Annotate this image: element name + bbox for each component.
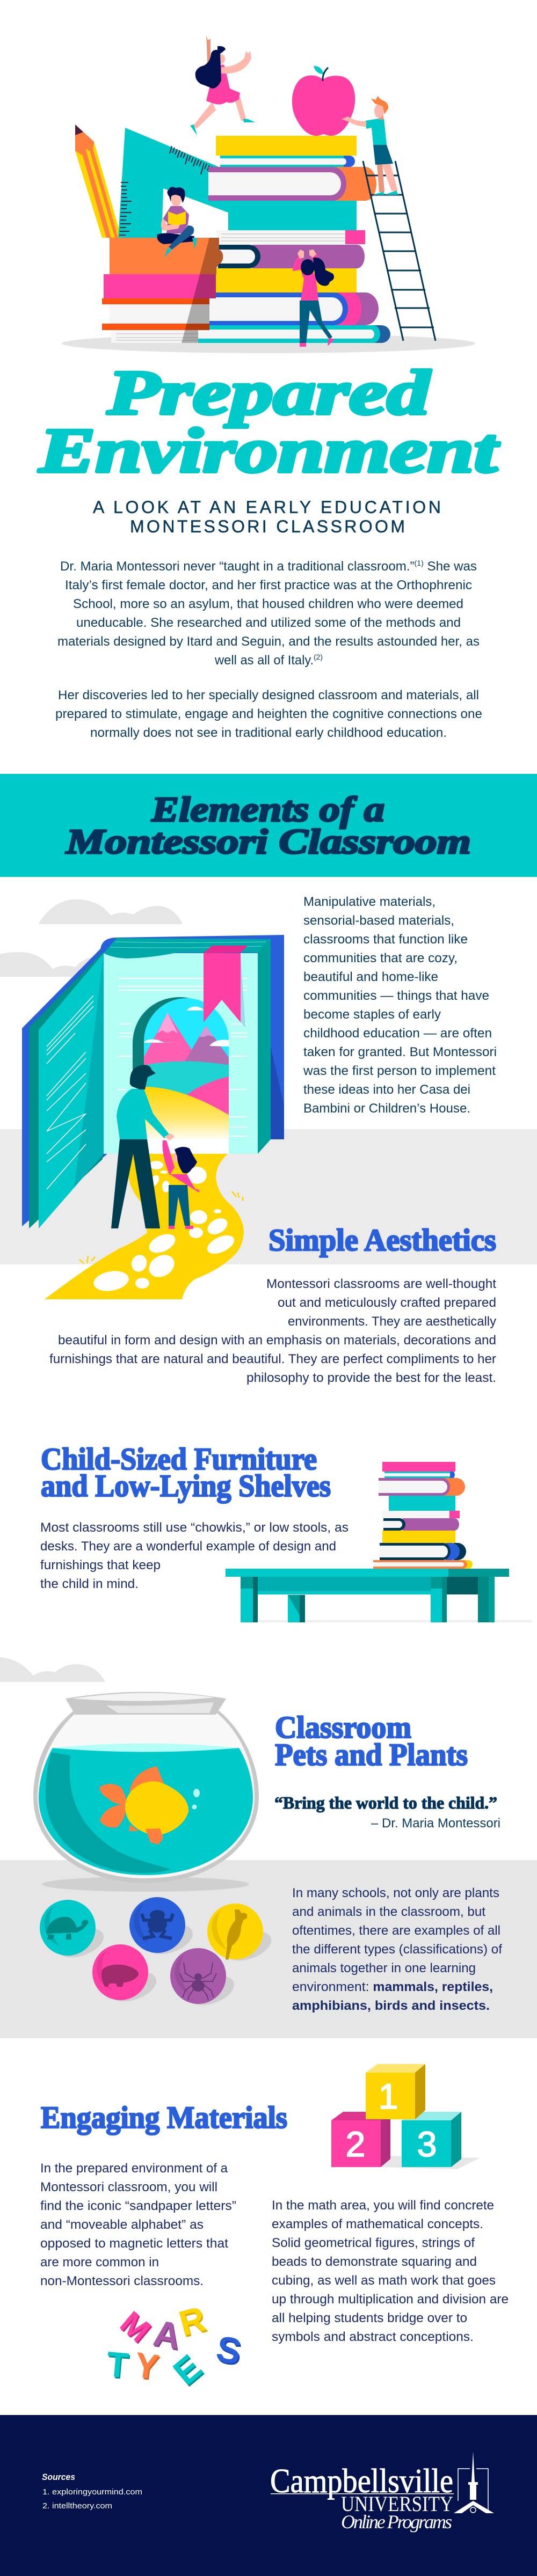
- block 1: 1: [379, 2076, 398, 2116]
- sources: 1. exploringyourmind.com: [42, 2487, 142, 2497]
- doorway scene: [144, 998, 229, 1154]
- book stack: [373, 1462, 473, 1569]
- illustration: alphabet letters: Y: [133, 2346, 162, 2389]
- title: [39, 357, 499, 486]
- intro text: (2): [314, 653, 323, 661]
- floor line: [258, 1620, 532, 1622]
- illustration: alphabet letters: [105, 2299, 245, 2394]
- text: pets and plants: the different types (classifications) of: [292, 1942, 502, 1957]
- text: intro to classroom elements: Bambini or Children’s House.: [303, 1101, 470, 1116]
- illustration: alphabet letters: R: [175, 2299, 210, 2344]
- girl holding hand: [163, 1140, 200, 1229]
- text: math area: In the math area, you will find concrete: [272, 2198, 494, 2213]
- water: [39, 1748, 253, 1875]
- text: math area: up through multiplication and division are: [272, 2292, 509, 2307]
- book stack right: [198, 136, 390, 343]
- text: pets and plants: amphibians, birds and insects.: [292, 1999, 490, 2013]
- illustration: alphabet letters: Y: [132, 2345, 161, 2387]
- text: furniture: desks. They are a wonderful example of design and: [40, 1539, 336, 1554]
- man: [111, 1065, 175, 1228]
- text: intro to classroom elements: [303, 895, 497, 1116]
- icons: animal circles: [40, 1897, 275, 2011]
- sparks: [79, 1191, 243, 1263]
- illustration: open book with path: [22, 935, 284, 1299]
- child: girl jumping: [190, 35, 255, 135]
- glass bowl: [33, 1711, 259, 1883]
- quote: [274, 1793, 500, 1831]
- text: intro to classroom elements: childhood education — are often: [303, 1026, 492, 1041]
- block 3: 3: [417, 2124, 437, 2164]
- left page: [39, 953, 104, 1228]
- text: furniture: Most classrooms still use “chowkis,” or low stools, as: [40, 1520, 349, 1535]
- illustration: alphabet letters: E: [167, 2348, 211, 2394]
- yellow path: [45, 1154, 244, 1299]
- intro text: materials designed by Itard and Seguin, and the results astounded her, as: [57, 634, 480, 649]
- text: engaging materials: [40, 2161, 236, 2288]
- text: furniture: [40, 1520, 349, 1591]
- child: girl reaching up: [293, 250, 335, 347]
- text: simple aesthetics: Montessori classrooms are well-thought: [266, 1277, 496, 1291]
- heading: child-sized furniture: and Low-Lying Shelves: [41, 1468, 331, 1503]
- text: pets and plants: animals together in one learning: [292, 1961, 476, 1975]
- text: engaging materials: opposed to magnetic letters that: [40, 2236, 228, 2251]
- intro text: She was: [424, 559, 477, 574]
- text: intro to classroom elements: classrooms that function like: [303, 932, 468, 947]
- text: simple aesthetics: out and meticulously crafted prepared: [278, 1296, 496, 1310]
- hero illustration: books, pencil and children: [62, 35, 475, 353]
- illustration: alphabet letters: A: [150, 2312, 184, 2357]
- intro text: School, more so an asylum, that housed children who were deemed: [73, 597, 463, 611]
- text: engaging materials: and “moveable alphabet” as: [40, 2218, 204, 2232]
- intro text: normally does not see in traditional early childhood education.: [90, 726, 447, 740]
- logo: Campbellsville University: UNIVERSITY: [341, 2492, 453, 2516]
- text: pets and plants: oftentimes, there are examples of all: [292, 1923, 500, 1938]
- block 2: 2: [346, 2124, 365, 2164]
- text: engaging materials: non-Montessori classrooms.: [40, 2274, 204, 2288]
- text: math area: examples of mathematical concepts.: [272, 2217, 483, 2231]
- text: math area: symbols and abstract conceptions.: [272, 2330, 474, 2344]
- illustration: alphabet letters: M: [113, 2304, 157, 2349]
- illustration: fish bowl: [33, 1692, 259, 1892]
- text: intro to classroom elements: these ideas into her Casa dei: [303, 1082, 470, 1097]
- illustration: alphabet letters: T: [106, 2345, 131, 2387]
- set square: [118, 128, 357, 239]
- title: Prepared: [107, 357, 431, 428]
- text: engaging materials: Montessori classroom, you will: [40, 2180, 217, 2194]
- footer: [0, 2415, 537, 2576]
- text: simple aesthetics: philosophy to provide the best for the least.: [246, 1371, 496, 1385]
- cloud: [0, 1657, 105, 1682]
- text: simple aesthetics: furnishings that are natural and beautiful. They are perfect compliments to her: [49, 1352, 496, 1366]
- block 1: [366, 2064, 425, 2119]
- text: intro to classroom elements: beautiful and home-like: [303, 970, 438, 984]
- text: intro to classroom elements: was the first person to implement: [303, 1064, 496, 1078]
- illustration: alphabet letters: T: [105, 2344, 130, 2385]
- book stack left: [102, 238, 223, 343]
- child: reading on the book: [157, 187, 197, 258]
- intro text: Italy’s first female doctor, and her first practice was at the Orthophrenic: [65, 578, 472, 592]
- icon: parrot: [207, 1904, 275, 1966]
- text: intro to classroom elements: become staples of early: [303, 1007, 441, 1022]
- heading: classroom pets and plants: [275, 1710, 468, 1772]
- text: intro to classroom elements: communities that are cozy,: [303, 951, 458, 965]
- bowl shadow: [42, 1877, 249, 1892]
- text: simple aesthetics: [49, 1277, 496, 1385]
- subtitle: [93, 497, 441, 536]
- text: furniture: the child in mind.: [40, 1577, 139, 1591]
- text: pets and plants: In many schools, not only are plants: [292, 1886, 499, 1900]
- text: pets and plants: environment: mammals, reptiles,: [292, 1980, 493, 1994]
- right page: [104, 953, 258, 1154]
- heading: child-sized furniture: Child-Sized Furniture: [41, 1441, 317, 1476]
- text: math area: cubing, as well as math work that goes: [272, 2273, 496, 2288]
- text: intro to classroom elements: Manipulative materials,: [303, 895, 436, 909]
- sources: [42, 2472, 142, 2511]
- ruler ticks: [119, 146, 217, 235]
- illustration: number blocks: [331, 2064, 480, 2169]
- heading: classroom pets and plants: Classroom: [275, 1710, 411, 1745]
- text: simple aesthetics: environments. They are aesthetically: [288, 1314, 496, 1329]
- background band: pets and plants: [0, 1860, 537, 2038]
- fish: [99, 1766, 200, 1845]
- illustration: alphabet letters: R: [176, 2300, 211, 2345]
- text: intro to classroom elements: sensorial-based materials,: [303, 913, 454, 928]
- intro text: (1): [415, 559, 424, 567]
- text: math area: Solid geometrical figures, strings of: [272, 2236, 475, 2250]
- quote: “Bring the world to the child.”: [274, 1793, 497, 1812]
- text: furniture: furnishings that keep: [40, 1558, 161, 1572]
- banner: elements of a Montessori classroom: Montessori Classroom: [66, 822, 471, 861]
- text: simple aesthetics: beautiful in form and design with an emphasis on materials, decorations and: [58, 1333, 496, 1348]
- sources: Sources: [42, 2472, 75, 2482]
- subtitle: A LOOK AT AN EARLY EDUCATION: [93, 497, 441, 517]
- banner: elements of a Montessori classroom: Elements of a: [151, 790, 384, 829]
- illustration: alphabet letters: M: [114, 2306, 158, 2351]
- logo: chapel steeple: [454, 2451, 494, 2513]
- text: math area: beads to demonstrate squaring and: [272, 2255, 477, 2269]
- text: engaging materials: In the prepared environment of a: [40, 2161, 228, 2176]
- icon: apple: [292, 66, 355, 136]
- heading: engaging materials: Engaging Materials: [41, 2100, 287, 2135]
- ground shadow: [62, 334, 475, 353]
- text: intro to classroom elements: taken for granted. But Montessori: [303, 1045, 497, 1059]
- icon: frog: [129, 1897, 197, 1960]
- intro text: Dr. Maria Montessori never “taught in a traditional classroom.”: [60, 559, 412, 574]
- background band: simple aesthetics: [0, 1129, 537, 1264]
- heading: child-sized furniture: [41, 1441, 331, 1503]
- banner: elements of a Montessori classroom: [0, 774, 537, 877]
- intro text: prepared to stimulate, engage and heighten the cognitive connections one: [55, 707, 482, 721]
- subtitle: MONTESSORI CLASSROOM: [130, 517, 405, 536]
- intro text: uneducable. She researched and utilized some of the methods and: [76, 616, 461, 630]
- logo: Campbellsville University: [270, 2451, 494, 2533]
- block 3: [402, 2112, 461, 2167]
- text: intro to classroom elements: communities — things that have: [303, 989, 489, 1003]
- icon: spider: [170, 1948, 238, 2011]
- sources: 2. intelltheory.com: [42, 2501, 112, 2511]
- bowl rim: [66, 1692, 226, 1715]
- text: engaging materials: find the iconic “sandpaper letters”: [40, 2199, 236, 2213]
- intro text: well as all of Italy.: [215, 653, 315, 668]
- text: math area: [272, 2198, 509, 2344]
- text: pets and plants: [292, 1886, 502, 2013]
- heading: simple aesthetics: Simple Aesthetics: [268, 1223, 496, 1257]
- child: boy on ladder: [342, 96, 398, 195]
- block 2: [331, 2112, 390, 2167]
- bookmark: [222, 953, 245, 1028]
- illustration: table with books: [226, 1462, 532, 1622]
- text: math area: all helping students bridge over to: [272, 2311, 467, 2325]
- intro text: [55, 559, 482, 740]
- ladder: [363, 161, 436, 341]
- book cover: [22, 935, 284, 1226]
- illustration: alphabet letters: S: [213, 2328, 244, 2373]
- arch page edges: [133, 997, 198, 1073]
- stones: [92, 1161, 237, 1293]
- clouds: [0, 899, 183, 977]
- illustration: alphabet letters: A: [151, 2314, 185, 2359]
- icon: hamster: [92, 1944, 160, 2007]
- logo: Campbellsville University: Campbellsville: [270, 2462, 453, 2500]
- heading: classroom pets and plants: Pets and Plants: [275, 1737, 468, 1772]
- text: pets and plants: and animals in the classroom, but: [292, 1905, 485, 1919]
- icon: pencil: [75, 125, 121, 238]
- quote: – Dr. Maria Montessori: [371, 1816, 500, 1831]
- icon: turtle: [40, 1900, 107, 1963]
- illustration: alphabet letters: S: [214, 2330, 245, 2374]
- logo: Campbellsville University: Online Programs: [341, 2511, 452, 2533]
- table: [226, 1569, 509, 1622]
- title: Environment: [39, 415, 499, 486]
- illustration: alphabet letters: E: [166, 2347, 209, 2392]
- text: engaging materials: are more common in: [40, 2255, 159, 2270]
- intro text: Her discoveries led to her specially designed classroom and materials, all: [58, 688, 479, 702]
